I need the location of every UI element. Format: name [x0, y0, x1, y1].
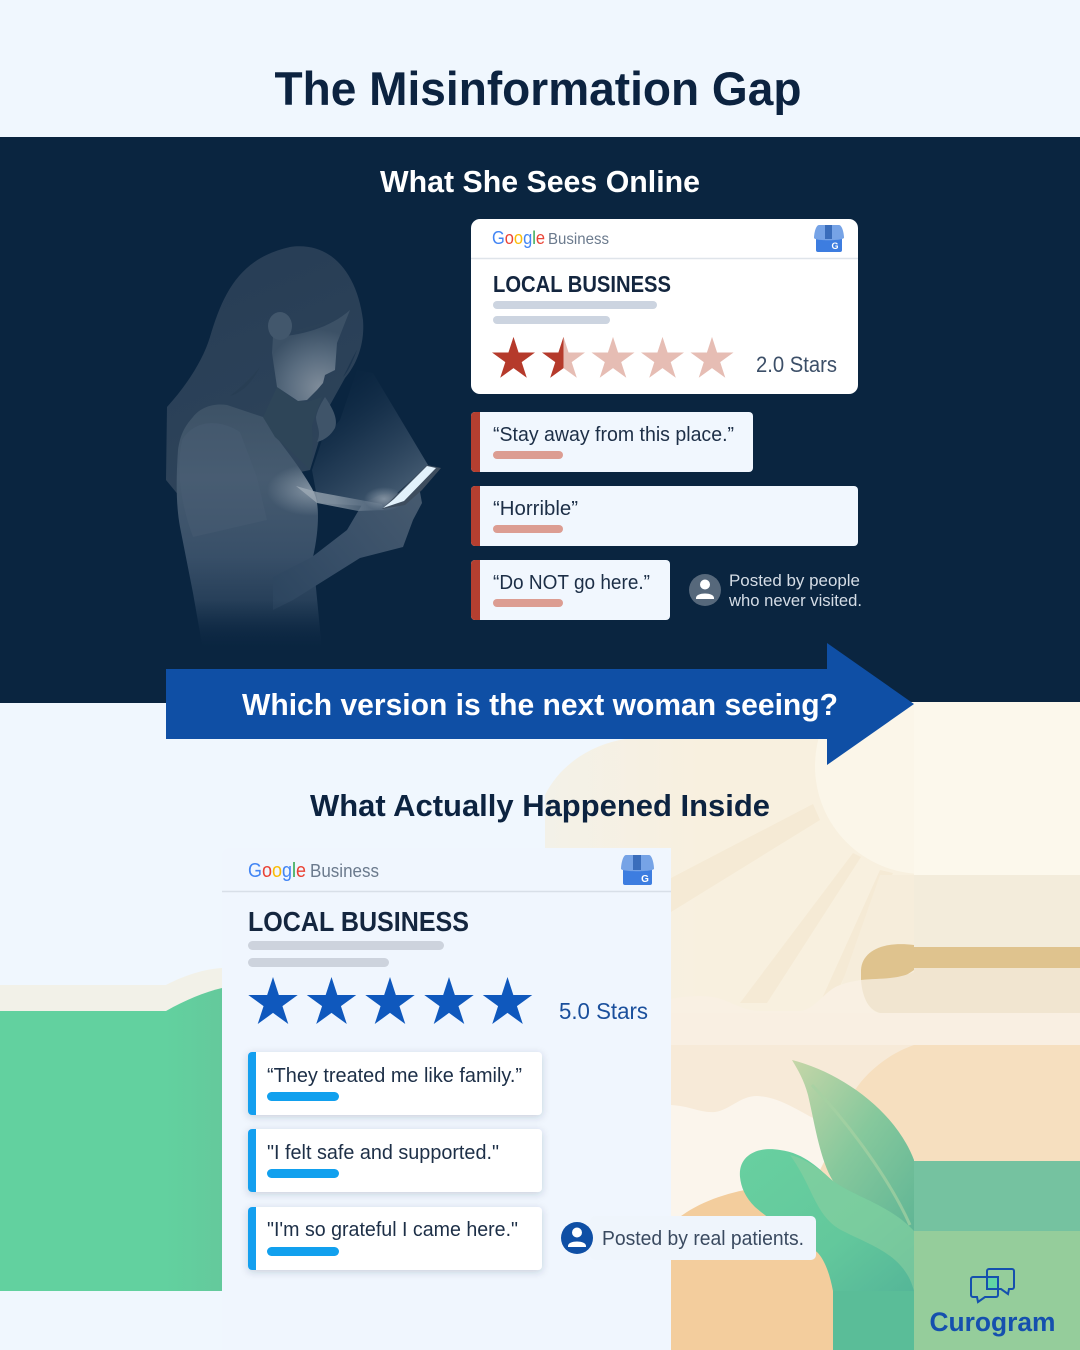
positive review 3: [248, 1207, 542, 1270]
note: posted by people who never visited: Posted by people: [729, 571, 860, 590]
sunrise illustration: [545, 702, 914, 1291]
title: The Misinformation Gap: [274, 62, 802, 115]
positive review 1: [248, 1052, 542, 1115]
positive review 3: "I'm so grateful I came here.": [267, 1219, 518, 1241]
sleeve: [179, 423, 267, 537]
curogram logo: Curogram: [930, 1307, 1056, 1337]
icon: chat bubbles: [971, 1269, 1014, 1302]
neck shadow: [267, 424, 279, 440]
bottom fade: [198, 621, 320, 632]
note: posted by people who never visited: who never visited.: [728, 591, 862, 610]
icon: google store: G: [641, 874, 649, 885]
negative review 3: “Do NOT go here.”: [493, 572, 650, 594]
note: posted by real patients: [561, 1216, 816, 1260]
star rating: 5 of 5: [248, 977, 532, 1024]
negative review 3: [471, 560, 670, 620]
panel: 5.0 star business: [222, 848, 671, 1350]
business name: LOCAL BUSINESS: [493, 271, 671, 297]
google logo: Google: [492, 228, 545, 248]
illustration: woman looking at phone: [166, 246, 441, 626]
google logo: Google: [248, 860, 306, 882]
arrow banner: Which version is the next woman seeing?: [242, 687, 838, 722]
hand glow: [366, 488, 398, 510]
heading: what she sees online: What She Sees Online: [380, 164, 700, 199]
face: [272, 310, 350, 401]
forearm and hand: [313, 492, 422, 586]
positive review 2: "I felt safe and supported.": [267, 1142, 499, 1164]
rating label: 2.0 Stars: [756, 352, 837, 377]
icon: google store: G: [831, 241, 839, 251]
positive review 1: “They treated me like family.”: [267, 1065, 522, 1087]
hair strands: [316, 352, 356, 442]
negative review 2: [471, 486, 858, 546]
negative review 1: “Stay away from this place.”: [493, 424, 734, 446]
left green hill: [0, 968, 222, 1291]
torso: [176, 404, 320, 626]
negative review 2: “Horrible”: [493, 498, 578, 520]
icon: person: [561, 1222, 593, 1254]
business label: Business: [310, 861, 379, 881]
hair: [166, 246, 363, 497]
business label: Business: [548, 231, 609, 248]
chest glow: [273, 469, 318, 512]
note: posted by people who never visited: [689, 571, 862, 610]
business name: LOCAL BUSINESS: [248, 906, 469, 937]
heading: what actually happened inside: What Actually Happened Inside: [310, 788, 770, 823]
bottom colour blocks: [671, 1291, 914, 1350]
icon: google store: [814, 225, 844, 252]
positive review 2: [248, 1129, 542, 1192]
green blob: [740, 1149, 914, 1291]
card: 2.0 star business: [471, 219, 858, 394]
star rating: 2 of 5: [492, 337, 733, 378]
right colour bands: [914, 702, 1080, 1350]
icon: google store: [621, 855, 654, 885]
note: posted by real patients: Posted by real patients.: [602, 1228, 804, 1250]
ear: [268, 312, 292, 337]
arrow banner: [166, 643, 914, 765]
light beam: [296, 486, 384, 511]
curogram logo: [930, 1269, 1056, 1337]
phone: [382, 465, 441, 509]
dark section background: [0, 137, 1080, 703]
leaf: [792, 1060, 914, 1235]
rating label: 5.0 Stars: [559, 998, 648, 1024]
negative review 1: [471, 412, 753, 472]
light cone: [312, 392, 428, 506]
